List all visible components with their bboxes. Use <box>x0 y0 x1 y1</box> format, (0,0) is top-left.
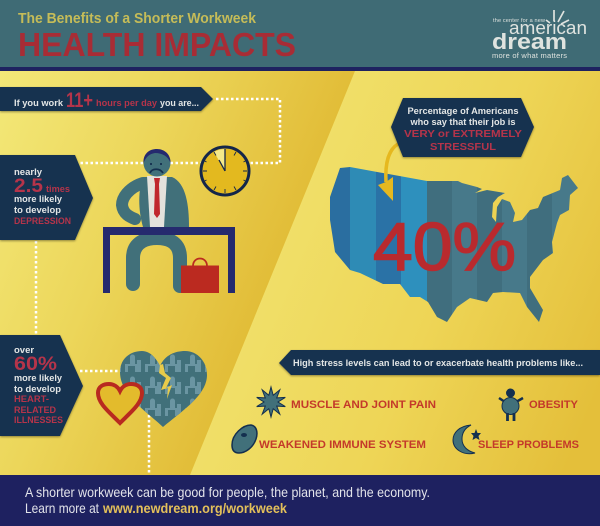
icon: stressed office worker at desk <box>103 149 235 293</box>
footer band: Learn more at <box>25 500 99 516</box>
map of the United States with 40% <box>330 167 578 322</box>
logo: new american dream: dream <box>492 29 567 54</box>
subtitle: The Benefits of a Shorter Workweek <box>18 10 257 27</box>
banner: 11+ hours per day: hours per day <box>96 98 158 109</box>
callout: heart-related illnesses: 60% <box>14 354 57 375</box>
callout: heart-related illnesses <box>0 335 83 436</box>
item: obesity <box>499 389 579 421</box>
40% figure: 40% <box>373 209 516 285</box>
banner: 11+ hours per day: If you work <box>14 98 64 109</box>
item: weakened immune system <box>232 425 426 453</box>
callout: heart-related illnesses: HEART- <box>14 394 49 404</box>
banner: 11+ hours per day <box>0 87 213 112</box>
callout: percentage of Americans <box>391 98 534 157</box>
callout: percentage of Americans: who say that their job is <box>410 117 516 128</box>
banner: 11+ hours per day: 11+ <box>66 89 93 112</box>
item: muscle and joint pain <box>257 387 436 417</box>
callout: heart-related illnesses: RELATED <box>14 405 56 415</box>
icon: clock <box>201 147 249 195</box>
callout: depression <box>0 155 93 240</box>
callout: heart-related illnesses: over <box>14 345 34 356</box>
hair <box>143 149 171 163</box>
logo: new american dream: more of what matters <box>492 51 567 60</box>
footer band <box>0 475 600 526</box>
logo: new american dream: the center for a new <box>493 18 545 24</box>
title: HEALTH IMPACTS <box>18 26 296 63</box>
shirt <box>147 176 167 227</box>
callout: depression: DEPRESSION <box>14 216 71 226</box>
callout: percentage of Americans: Percentage of Americans <box>408 106 518 117</box>
callout: percentage of Americans: STRESSFUL <box>430 141 497 153</box>
callout: depression: nearly <box>14 167 43 178</box>
callout: depression: 2.5 <box>14 176 43 197</box>
footer band: www.newdream.org/workweek <box>102 500 287 516</box>
worker legs <box>133 238 180 286</box>
head <box>144 150 170 176</box>
banner: high stress levels <box>279 350 600 375</box>
logo: new american dream <box>492 10 587 60</box>
face <box>150 163 163 173</box>
item: weakened immune system: WEAKENED IMMUNE SYSTEM <box>259 439 426 451</box>
tie <box>154 178 160 218</box>
background: right panel <box>190 71 600 475</box>
worker torso and right arm <box>139 177 189 227</box>
banner: high stress levels: High stress levels can lead to or exacerbate health problems like... <box>293 358 583 369</box>
briefcase <box>181 258 219 293</box>
callout: percentage of Americans: VERY or EXTREMELY <box>404 128 522 140</box>
callout: depression: more likely <box>14 194 63 205</box>
item: obesity: OBESITY <box>529 399 579 411</box>
dotted connector lines <box>36 99 280 474</box>
callout: heart-related illnesses: to develop <box>14 384 61 395</box>
icon: small healthy heart <box>98 384 142 423</box>
footer band: A shorter workweek can be good for people, the planet, and the economy. <box>25 484 430 500</box>
arrow: from callout to map <box>378 144 398 201</box>
item: muscle and joint pain: MUSCLE AND JOINT PAIN <box>291 399 436 411</box>
callout: heart-related illnesses: ILLNESSES <box>14 415 63 425</box>
header band <box>0 0 600 71</box>
background: left panel <box>0 71 600 475</box>
item: sleep problems: SLEEP PROBLEMS <box>478 439 579 451</box>
callout: depression: to develop <box>14 205 61 216</box>
desk <box>103 227 235 293</box>
callout: heart-related illnesses: more likely <box>14 373 63 384</box>
icon: broken heart with office workers <box>118 350 210 428</box>
item: sleep problems <box>453 425 579 454</box>
callout: depression: times <box>46 184 70 195</box>
worker left arm <box>122 183 143 219</box>
banner: 11+ hours per day: you are... <box>160 98 199 109</box>
logo: new american dream: american <box>509 18 587 38</box>
